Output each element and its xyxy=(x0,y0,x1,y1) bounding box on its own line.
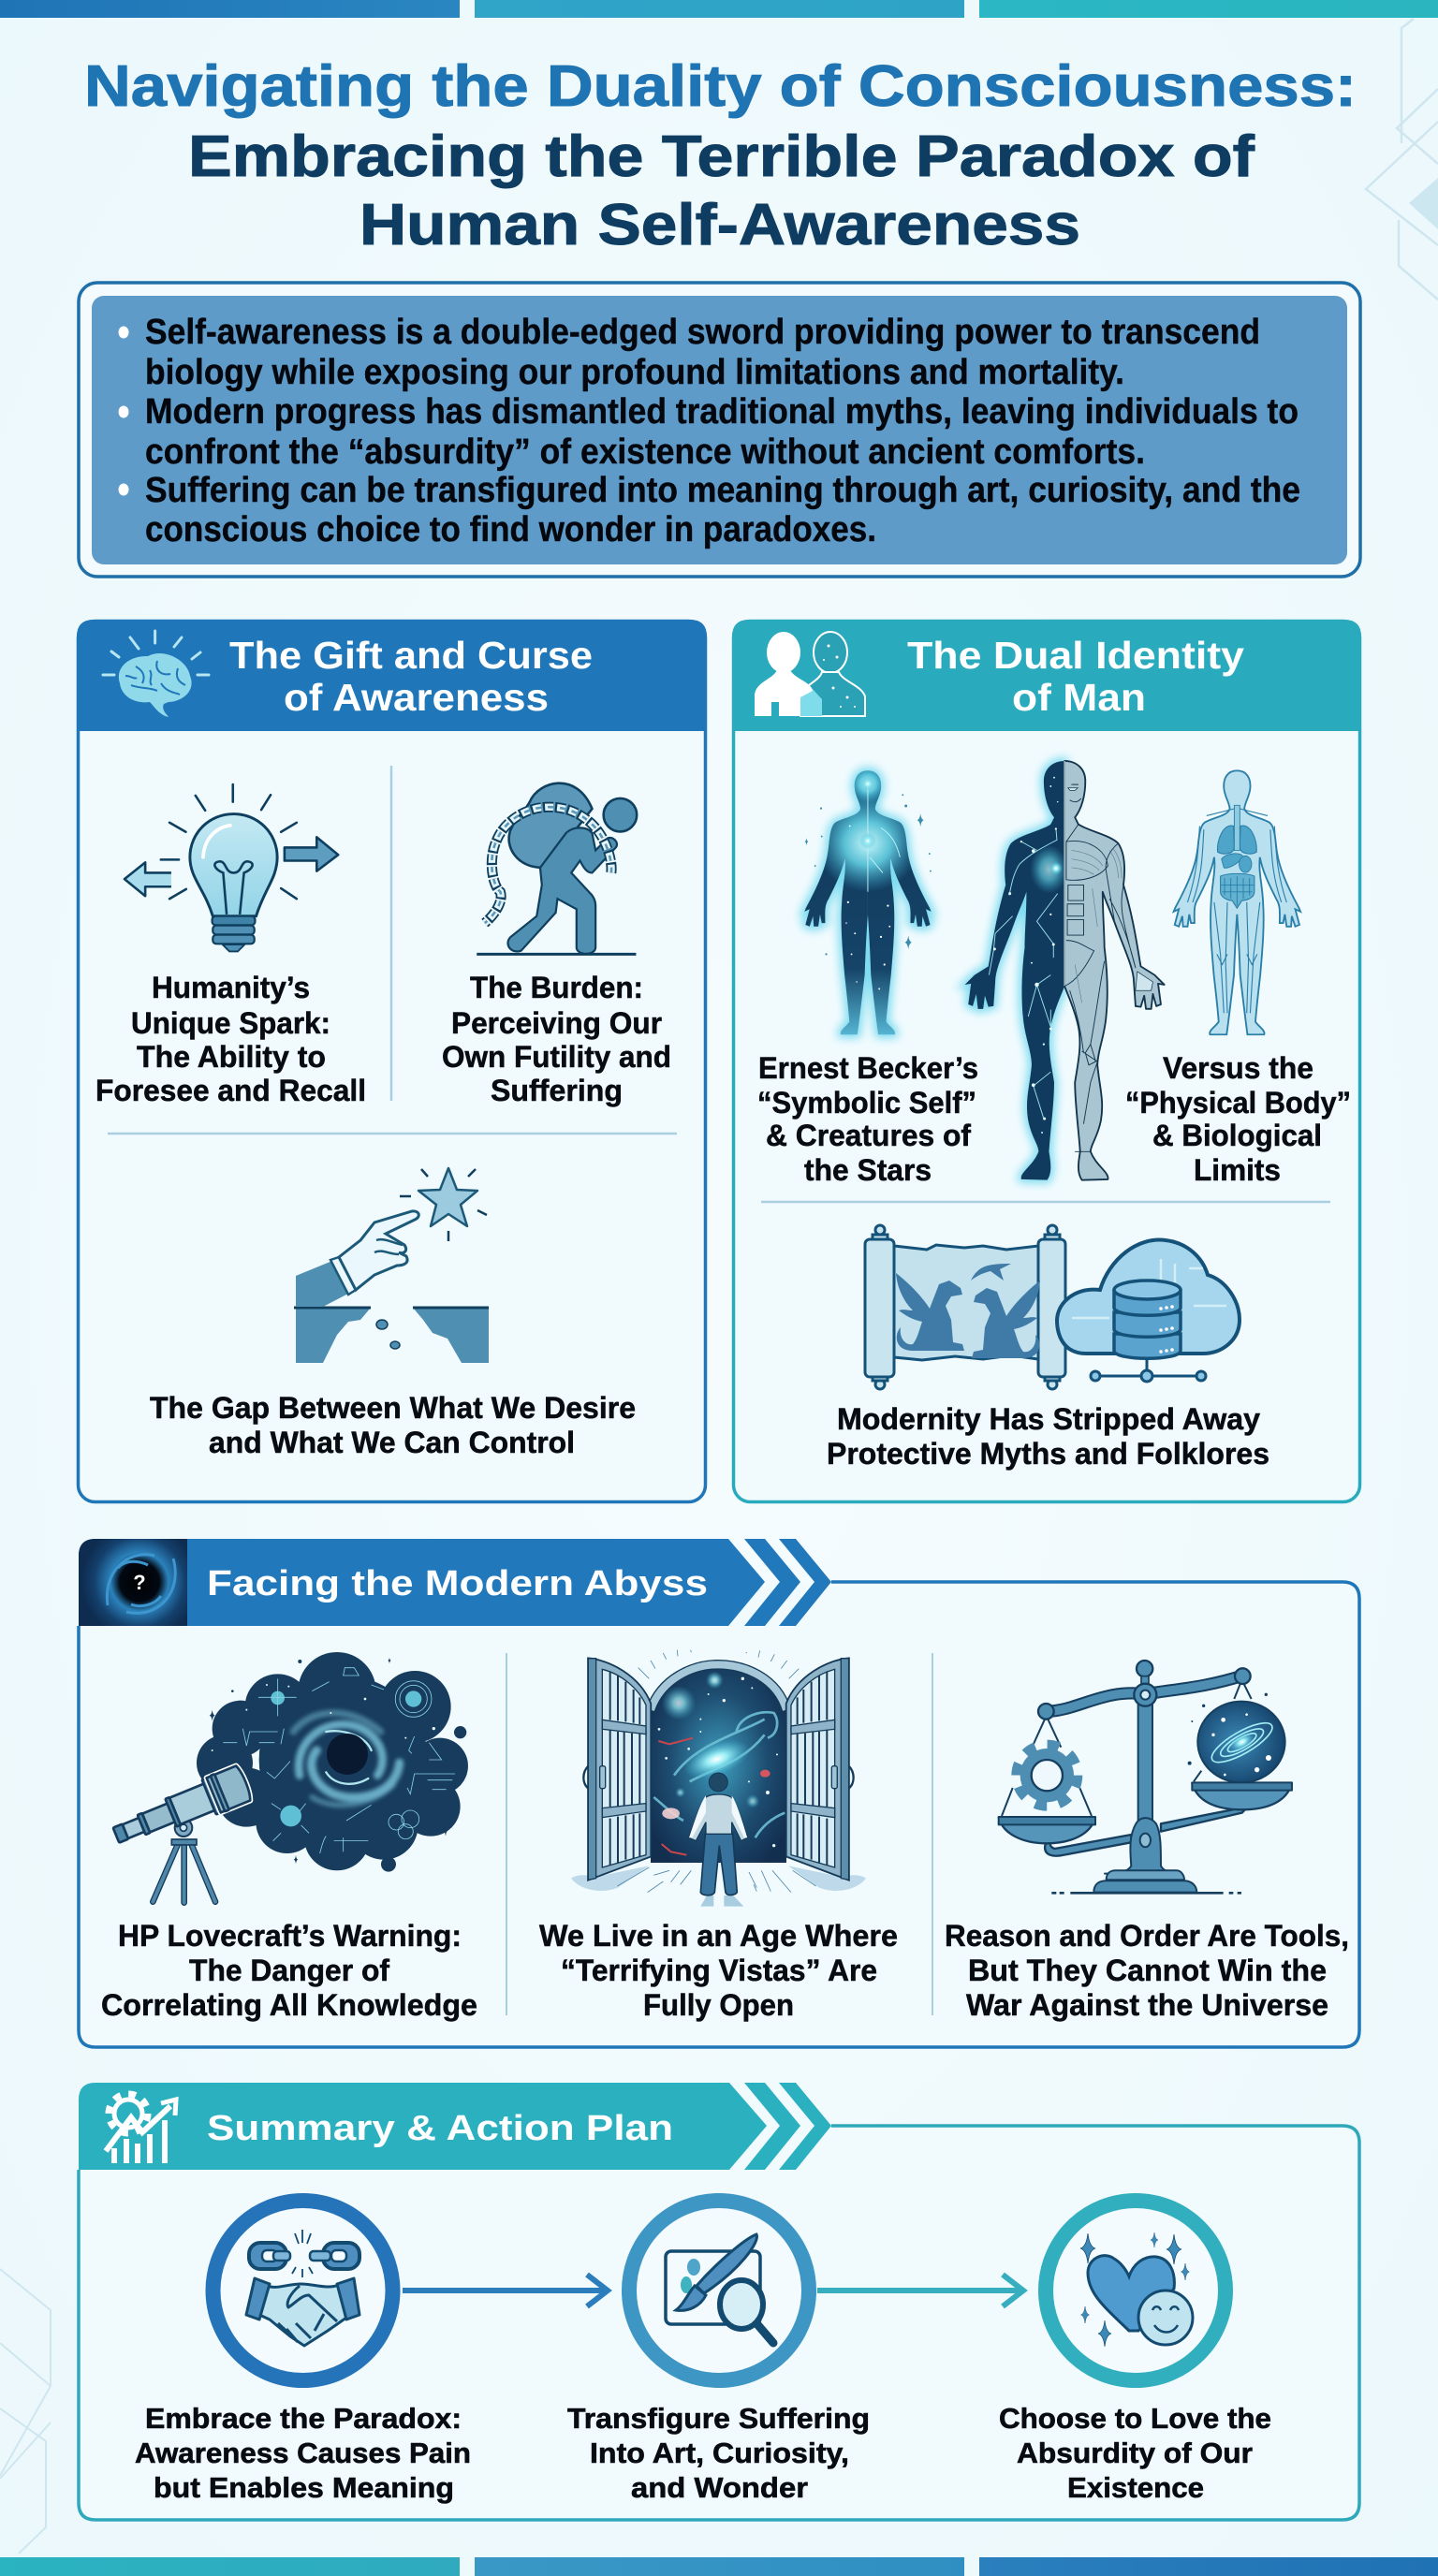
caption: symbolic self: Ernest Becker’s xyxy=(758,1051,978,1085)
caption: the burden: Perceiving Our xyxy=(451,1006,662,1040)
heading: The Gift and Curse xyxy=(229,634,593,677)
caption: modernity: Modernity Has Stripped Away xyxy=(837,1402,1260,1436)
heading: The Dual Identity xyxy=(907,634,1244,677)
caption: terrifying vistas: “Terrifying Vistas” Are xyxy=(561,1954,877,1987)
panel: summary and action plan xyxy=(79,2083,1359,2520)
caption: embrace the paradox: Awareness Causes Pain xyxy=(135,2437,471,2469)
caption: terrifying vistas: Fully Open xyxy=(643,1988,794,2022)
caption: embrace the paradox xyxy=(135,2402,471,2504)
heading xyxy=(229,634,593,719)
caption: choose to love: Choose to Love the xyxy=(999,2402,1271,2435)
icon: data cloud xyxy=(1057,1240,1240,1382)
caption: reason and order xyxy=(945,1919,1349,2022)
caption: symbolic self: “Symbolic Self” xyxy=(757,1086,976,1120)
caption: physical body xyxy=(1125,1051,1351,1187)
icon: telescope and cosmic cloud xyxy=(109,1652,468,1903)
caption: the burden: Suffering xyxy=(491,1074,623,1107)
icon: open gate to cosmos xyxy=(571,1650,866,1907)
caption: transfigure suffering: Into Art, Curiosity, xyxy=(590,2437,849,2469)
caption: symbolic self: & Creatures of xyxy=(766,1119,971,1152)
icon: balance scale xyxy=(999,1661,1292,1893)
caption: modernity xyxy=(827,1402,1269,1471)
icon: symbolic self figure xyxy=(804,765,932,1034)
bottom colour bars xyxy=(0,2557,1438,2576)
heading: of Awareness xyxy=(284,676,549,719)
caption: terrifying vistas: We Live in an Age Where xyxy=(539,1919,898,1953)
icon: handshake xyxy=(246,2278,360,2346)
panel: facing the modern abyss xyxy=(79,1539,1359,2047)
bullet 1: Self-awareness is a double-edged sword providing power to transcend xyxy=(145,313,1260,352)
title xyxy=(84,54,1357,257)
caption: lovecraft: The Danger of xyxy=(189,1954,389,1987)
caption: the gap: and What We Can Control xyxy=(209,1426,575,1459)
summary box xyxy=(79,283,1360,577)
caption: lovecraft: Correlating All Knowledge xyxy=(101,1988,477,2022)
step 2 circle with brush xyxy=(629,2201,809,2380)
caption: the burden: Own Futility and xyxy=(442,1040,671,1074)
heading: Summary & Action Plan xyxy=(207,2109,673,2148)
caption: the gap xyxy=(150,1391,636,1459)
caption: the burden xyxy=(442,971,671,1107)
icon: brain xyxy=(103,631,209,717)
caption: humanity's unique spark: Unique Spark: xyxy=(131,1006,330,1040)
heading: of Man xyxy=(1012,676,1146,719)
bullet 3: conscious choice to find wonder in paradoxes. xyxy=(145,510,876,549)
icon: hand reaching for star over a gap xyxy=(294,1168,489,1363)
caption: humanity's unique spark xyxy=(95,971,366,1107)
caption: symbolic self: the Stars xyxy=(804,1153,932,1187)
icon: half cosmic half anatomical figure xyxy=(965,761,1165,1180)
caption: symbolic self xyxy=(757,1051,978,1187)
section banner xyxy=(79,1539,831,1626)
caption: embrace the paradox: Embrace the Paradox: xyxy=(145,2402,462,2435)
icon: gear and growth arrow xyxy=(106,2094,176,2163)
icon: broken chain xyxy=(249,2230,360,2277)
arrow 1 xyxy=(403,2275,608,2306)
caption: transfigure suffering xyxy=(567,2402,870,2504)
bullet 3: Suffering can be transfigured into meaning through art, curiosity, and the xyxy=(145,471,1300,510)
heading: Facing the Modern Abyss xyxy=(207,1564,708,1603)
icon: burden figure xyxy=(477,783,637,954)
icon: heart and smile xyxy=(1088,2256,1193,2345)
icon: black hole xyxy=(79,1539,187,1626)
icon: physical body figure xyxy=(1174,770,1300,1034)
panel: the dual identity of man xyxy=(732,620,1361,1501)
section banner xyxy=(79,2083,831,2170)
caption: choose to love: Existence xyxy=(1067,2471,1204,2504)
caption: reason and order: War Against the Universe xyxy=(966,1988,1328,2022)
title: Embracing the Terrible Paradox of xyxy=(188,124,1255,189)
panel: the gift and curse of awareness xyxy=(77,620,707,1501)
caption: humanity's unique spark: The Ability to xyxy=(137,1040,326,1074)
icon: sparkles xyxy=(1080,2232,1189,2347)
bullet 2 xyxy=(118,392,1299,472)
caption: the gap: The Gap Between What We Desire xyxy=(150,1391,636,1425)
icon: myth scroll xyxy=(865,1225,1065,1389)
icon: lightbulb xyxy=(125,784,338,951)
title: Navigating the Duality of Consciousness: xyxy=(84,54,1357,119)
caption: reason and order: But They Cannot Win the xyxy=(968,1954,1327,1987)
bullet 1 xyxy=(118,313,1260,392)
icon: two busts xyxy=(755,632,865,716)
divider xyxy=(761,1201,1330,1203)
caption: humanity's unique spark: Humanity’s xyxy=(152,971,310,1004)
top colour bars xyxy=(0,0,1438,18)
dividers xyxy=(506,1653,932,2015)
decorative hexagons bottom left xyxy=(0,2269,51,2554)
caption: humanity's unique spark: Foresee and Recall xyxy=(95,1074,366,1107)
bullet 3 xyxy=(118,471,1300,549)
bullet 1: biology while exposing our profound limitations and mortality. xyxy=(145,353,1124,392)
caption: the burden: The Burden: xyxy=(470,971,643,1004)
caption: physical body: “Physical Body” xyxy=(1125,1086,1351,1120)
step 1 circle with handshake xyxy=(213,2201,393,2380)
title: Human Self-Awareness xyxy=(360,193,1080,257)
caption: physical body: Limits xyxy=(1194,1153,1281,1187)
icon: canvas and brush xyxy=(666,2234,773,2343)
caption: choose to love xyxy=(999,2402,1271,2504)
caption: terrifying vistas xyxy=(539,1919,898,2022)
caption: transfigure suffering: and Wonder xyxy=(631,2471,808,2504)
caption: physical body: & Biological xyxy=(1152,1119,1322,1152)
dividers xyxy=(108,766,677,1134)
decorative hexagons top right xyxy=(1366,19,1438,300)
icon: black hole: ? xyxy=(133,1571,146,1594)
bullet 2: confront the “absurdity” of existence without ancient comforts. xyxy=(145,432,1145,472)
caption: embrace the paradox: but Enables Meaning xyxy=(154,2471,454,2504)
caption: choose to love: Absurdity of Our xyxy=(1017,2437,1253,2469)
caption: lovecraft: HP Lovecraft’s Warning: xyxy=(118,1919,462,1953)
caption: modernity: Protective Myths and Folklores xyxy=(827,1437,1269,1471)
caption: reason and order: Reason and Order Are Tools, xyxy=(945,1919,1349,1953)
heading xyxy=(907,634,1244,719)
caption: physical body: Versus the xyxy=(1163,1051,1313,1085)
bullet 2: Modern progress has dismantled traditional myths, leaving individuals to xyxy=(145,392,1299,432)
caption: lovecraft xyxy=(101,1919,477,2022)
arrow 2 xyxy=(817,2275,1023,2306)
step 3 circle with heart xyxy=(1046,2201,1225,2380)
caption: transfigure suffering: Transfigure Suffering xyxy=(567,2402,870,2435)
